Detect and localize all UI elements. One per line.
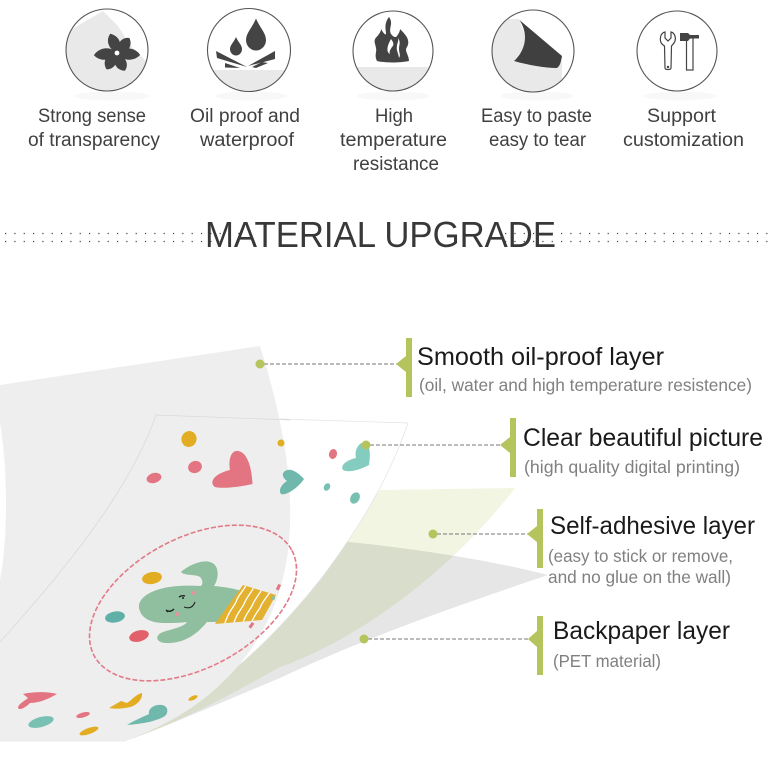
feature: strong sense of transparency xyxy=(28,9,160,151)
dashed ring xyxy=(64,493,322,713)
layered sticker illustration xyxy=(0,346,548,741)
description: and no glue on the wall) xyxy=(548,567,731,587)
label: High xyxy=(375,106,413,127)
icon: wrench and hammer xyxy=(637,11,717,100)
heading: Clear beautiful picture xyxy=(523,424,763,452)
feature: high temperature resistance xyxy=(340,11,447,175)
green bracket xyxy=(528,616,543,675)
description: (oil, water and high temperature resistence) xyxy=(419,375,752,395)
backpaper layer sheet xyxy=(125,541,548,741)
callout: smooth oil-proof layer xyxy=(256,338,752,397)
label: temperature xyxy=(340,130,447,151)
label: Support xyxy=(647,106,717,127)
heading: Self-adhesive layer xyxy=(550,512,755,540)
green bracket xyxy=(500,418,516,477)
title: MATERIAL UPGRADE xyxy=(205,214,556,255)
marker dot xyxy=(362,440,370,450)
icon: transparent flower sticker xyxy=(65,8,149,92)
label: Easy to paste xyxy=(481,106,592,127)
green bracket xyxy=(396,338,412,397)
leader line xyxy=(368,638,530,640)
self-adhesive layer sheet xyxy=(125,488,515,741)
marker dot xyxy=(360,634,368,644)
description: (easy to stick or remove, xyxy=(548,546,733,566)
label: Oil proof and xyxy=(190,106,300,127)
label: resistance xyxy=(353,154,439,175)
green bracket xyxy=(527,509,543,568)
smooth oil-proof top sheet xyxy=(0,346,290,741)
callout: clear beautiful picture xyxy=(362,418,763,477)
film outline through the top sheet xyxy=(0,415,290,642)
feature: support customization xyxy=(623,11,744,151)
marker dot xyxy=(428,530,438,538)
icon: peeling sticker xyxy=(491,10,575,92)
feature: easy to paste easy to tear xyxy=(481,10,592,151)
leader line xyxy=(370,444,502,446)
label: waterproof xyxy=(199,130,295,151)
label: easy to tear xyxy=(489,130,587,151)
marker dot xyxy=(256,360,264,368)
printed pattern: upper hearts and dots xyxy=(145,429,370,505)
label: of transparency xyxy=(28,130,160,151)
feature: oil proof and waterproof xyxy=(190,8,300,151)
description: (high quality digital printing) xyxy=(524,457,740,477)
callout: backpaper layer xyxy=(360,616,730,675)
leader line xyxy=(437,533,529,535)
heading: Smooth oil-proof layer xyxy=(417,343,664,371)
cactus character xyxy=(104,561,281,644)
clear picture film xyxy=(0,415,408,741)
description: (PET material) xyxy=(553,651,661,671)
callout: self-adhesive layer xyxy=(428,509,755,587)
leader line xyxy=(264,363,398,365)
icon: flames xyxy=(352,10,434,92)
printed pattern: lower hearts and dots xyxy=(18,692,198,737)
icon: water drops and splash xyxy=(206,8,292,92)
label: customization xyxy=(623,130,744,151)
label: Strong sense xyxy=(38,106,146,127)
heading: Backpaper layer xyxy=(553,617,730,645)
